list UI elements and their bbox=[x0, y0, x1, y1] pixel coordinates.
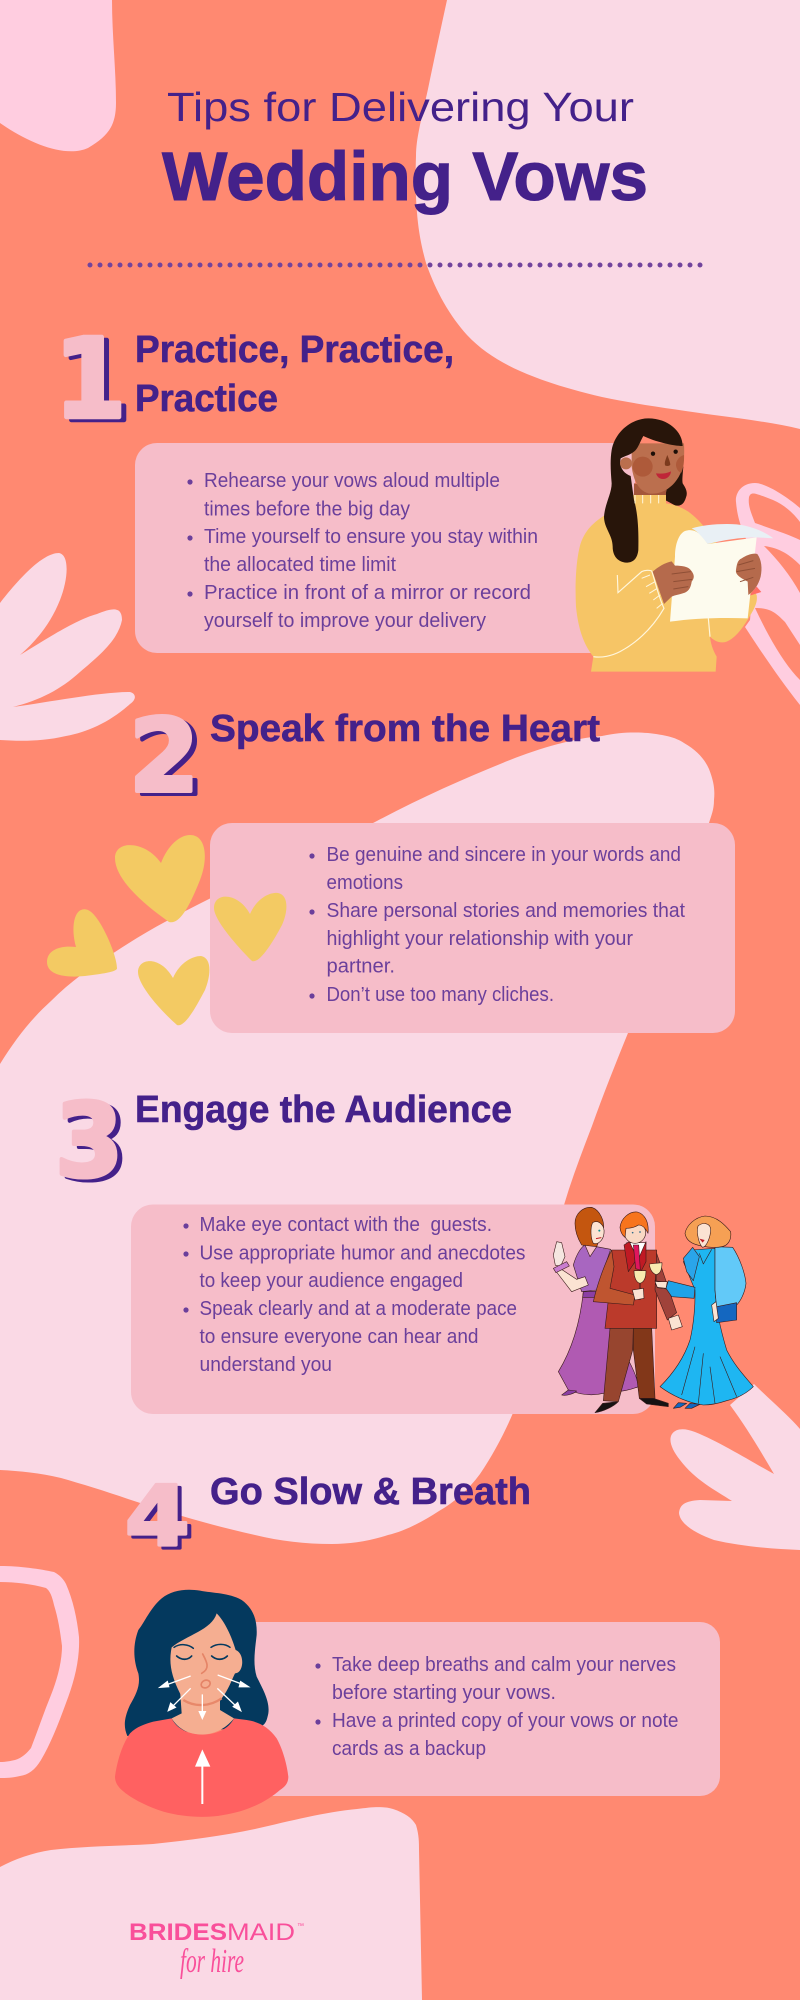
number 2: 2 bbox=[129, 697, 199, 815]
text box 2 bbox=[210, 823, 735, 1033]
blob: top left bbox=[0, 0, 116, 151]
text box 2: highlight your relationship with your bbox=[326, 927, 633, 950]
heading 1: Practice bbox=[135, 378, 278, 420]
text box 4: before starting your vows. bbox=[332, 1681, 556, 1704]
text box 3: to ensure everyone can hear and bbox=[200, 1325, 478, 1348]
number 2: 2 bbox=[134, 700, 204, 818]
heading 3: Engage the Audience bbox=[135, 1089, 512, 1131]
logo bbox=[129, 1919, 304, 1980]
number 1: 1 bbox=[54, 316, 126, 444]
text box 4: Have a printed copy of your vows or note bbox=[332, 1709, 678, 1732]
heading 1 bbox=[135, 329, 454, 420]
outline: right loop bbox=[736, 483, 800, 705]
leaf: lower right bbox=[670, 1384, 800, 1550]
number 4: 4 bbox=[125, 1468, 190, 1565]
panel: section 2 bbox=[47, 697, 735, 1033]
text box 3 bbox=[131, 1204, 655, 1414]
illustration: wedding guests bbox=[553, 1207, 753, 1413]
panel: section 3 bbox=[55, 1081, 753, 1414]
text box 3: Make eye contact with the guests. bbox=[200, 1213, 492, 1236]
heading 1: Practice, Practice, bbox=[135, 329, 454, 371]
title line 2: Wedding Vows bbox=[162, 138, 648, 215]
icon: hearts bbox=[47, 835, 286, 1025]
text box 2: Share personal stories and memories that bbox=[326, 899, 685, 922]
text box 3: Speak clearly and at a moderate pace bbox=[200, 1297, 517, 1320]
text box 1: yourself to improve your delivery bbox=[204, 609, 487, 632]
logo: MAID bbox=[227, 1919, 295, 1946]
text box 2: partner. bbox=[326, 954, 395, 978]
text box 3: understand you bbox=[200, 1353, 332, 1376]
text box 1: times before the big day bbox=[204, 498, 411, 520]
title bbox=[162, 84, 648, 215]
blob: top right bbox=[416, 0, 800, 429]
text box 4: Take deep breaths and calm your nerves bbox=[332, 1653, 676, 1676]
logo: BRIDES bbox=[129, 1919, 227, 1946]
text box 1: Practice in front of a mirror or record bbox=[204, 581, 531, 604]
text box 2: Don’t use too many cliches. bbox=[326, 983, 554, 1006]
icon: breath arrows bbox=[160, 1675, 248, 1804]
number 3: 3 bbox=[60, 1084, 128, 1203]
text box 1: the allocated time limit bbox=[204, 553, 396, 576]
text box 1: Rehearse your vows aloud multiple bbox=[204, 469, 500, 492]
text box 1 bbox=[135, 443, 635, 653]
title line 1: Tips for Delivering Your bbox=[167, 84, 634, 130]
number 1: 1 bbox=[59, 319, 131, 447]
text box 2: Be genuine and sincere in your words and bbox=[326, 843, 681, 866]
leaf: lower left bbox=[0, 553, 135, 741]
blob: bottom bbox=[0, 1807, 422, 2000]
logo: ™ bbox=[297, 1923, 304, 1930]
outline: left loop bbox=[0, 1566, 79, 1778]
number 4: 4 bbox=[129, 1471, 194, 1568]
number 3: 3 bbox=[55, 1081, 123, 1200]
logo: for hire bbox=[180, 1943, 244, 1980]
illustration: woman breathing bbox=[115, 1590, 288, 1817]
heading 2: Speak from the Heart bbox=[210, 708, 600, 750]
panel: section 4 bbox=[115, 1468, 720, 1817]
text box 4: cards as a backup bbox=[332, 1737, 486, 1760]
text box 1: Time yourself to ensure you stay within bbox=[204, 525, 538, 548]
panel: section 1 bbox=[54, 316, 773, 672]
blob: middle bbox=[0, 732, 714, 1544]
heading 4: Go Slow & Breath bbox=[210, 1471, 531, 1513]
text box 4 bbox=[230, 1622, 720, 1796]
illustration: woman reading vows bbox=[576, 418, 773, 672]
text box 2: emotions bbox=[326, 871, 403, 894]
text box 3: to keep your audience engaged bbox=[200, 1269, 463, 1292]
text box 3: Use appropriate humor and anecdotes bbox=[200, 1242, 526, 1264]
